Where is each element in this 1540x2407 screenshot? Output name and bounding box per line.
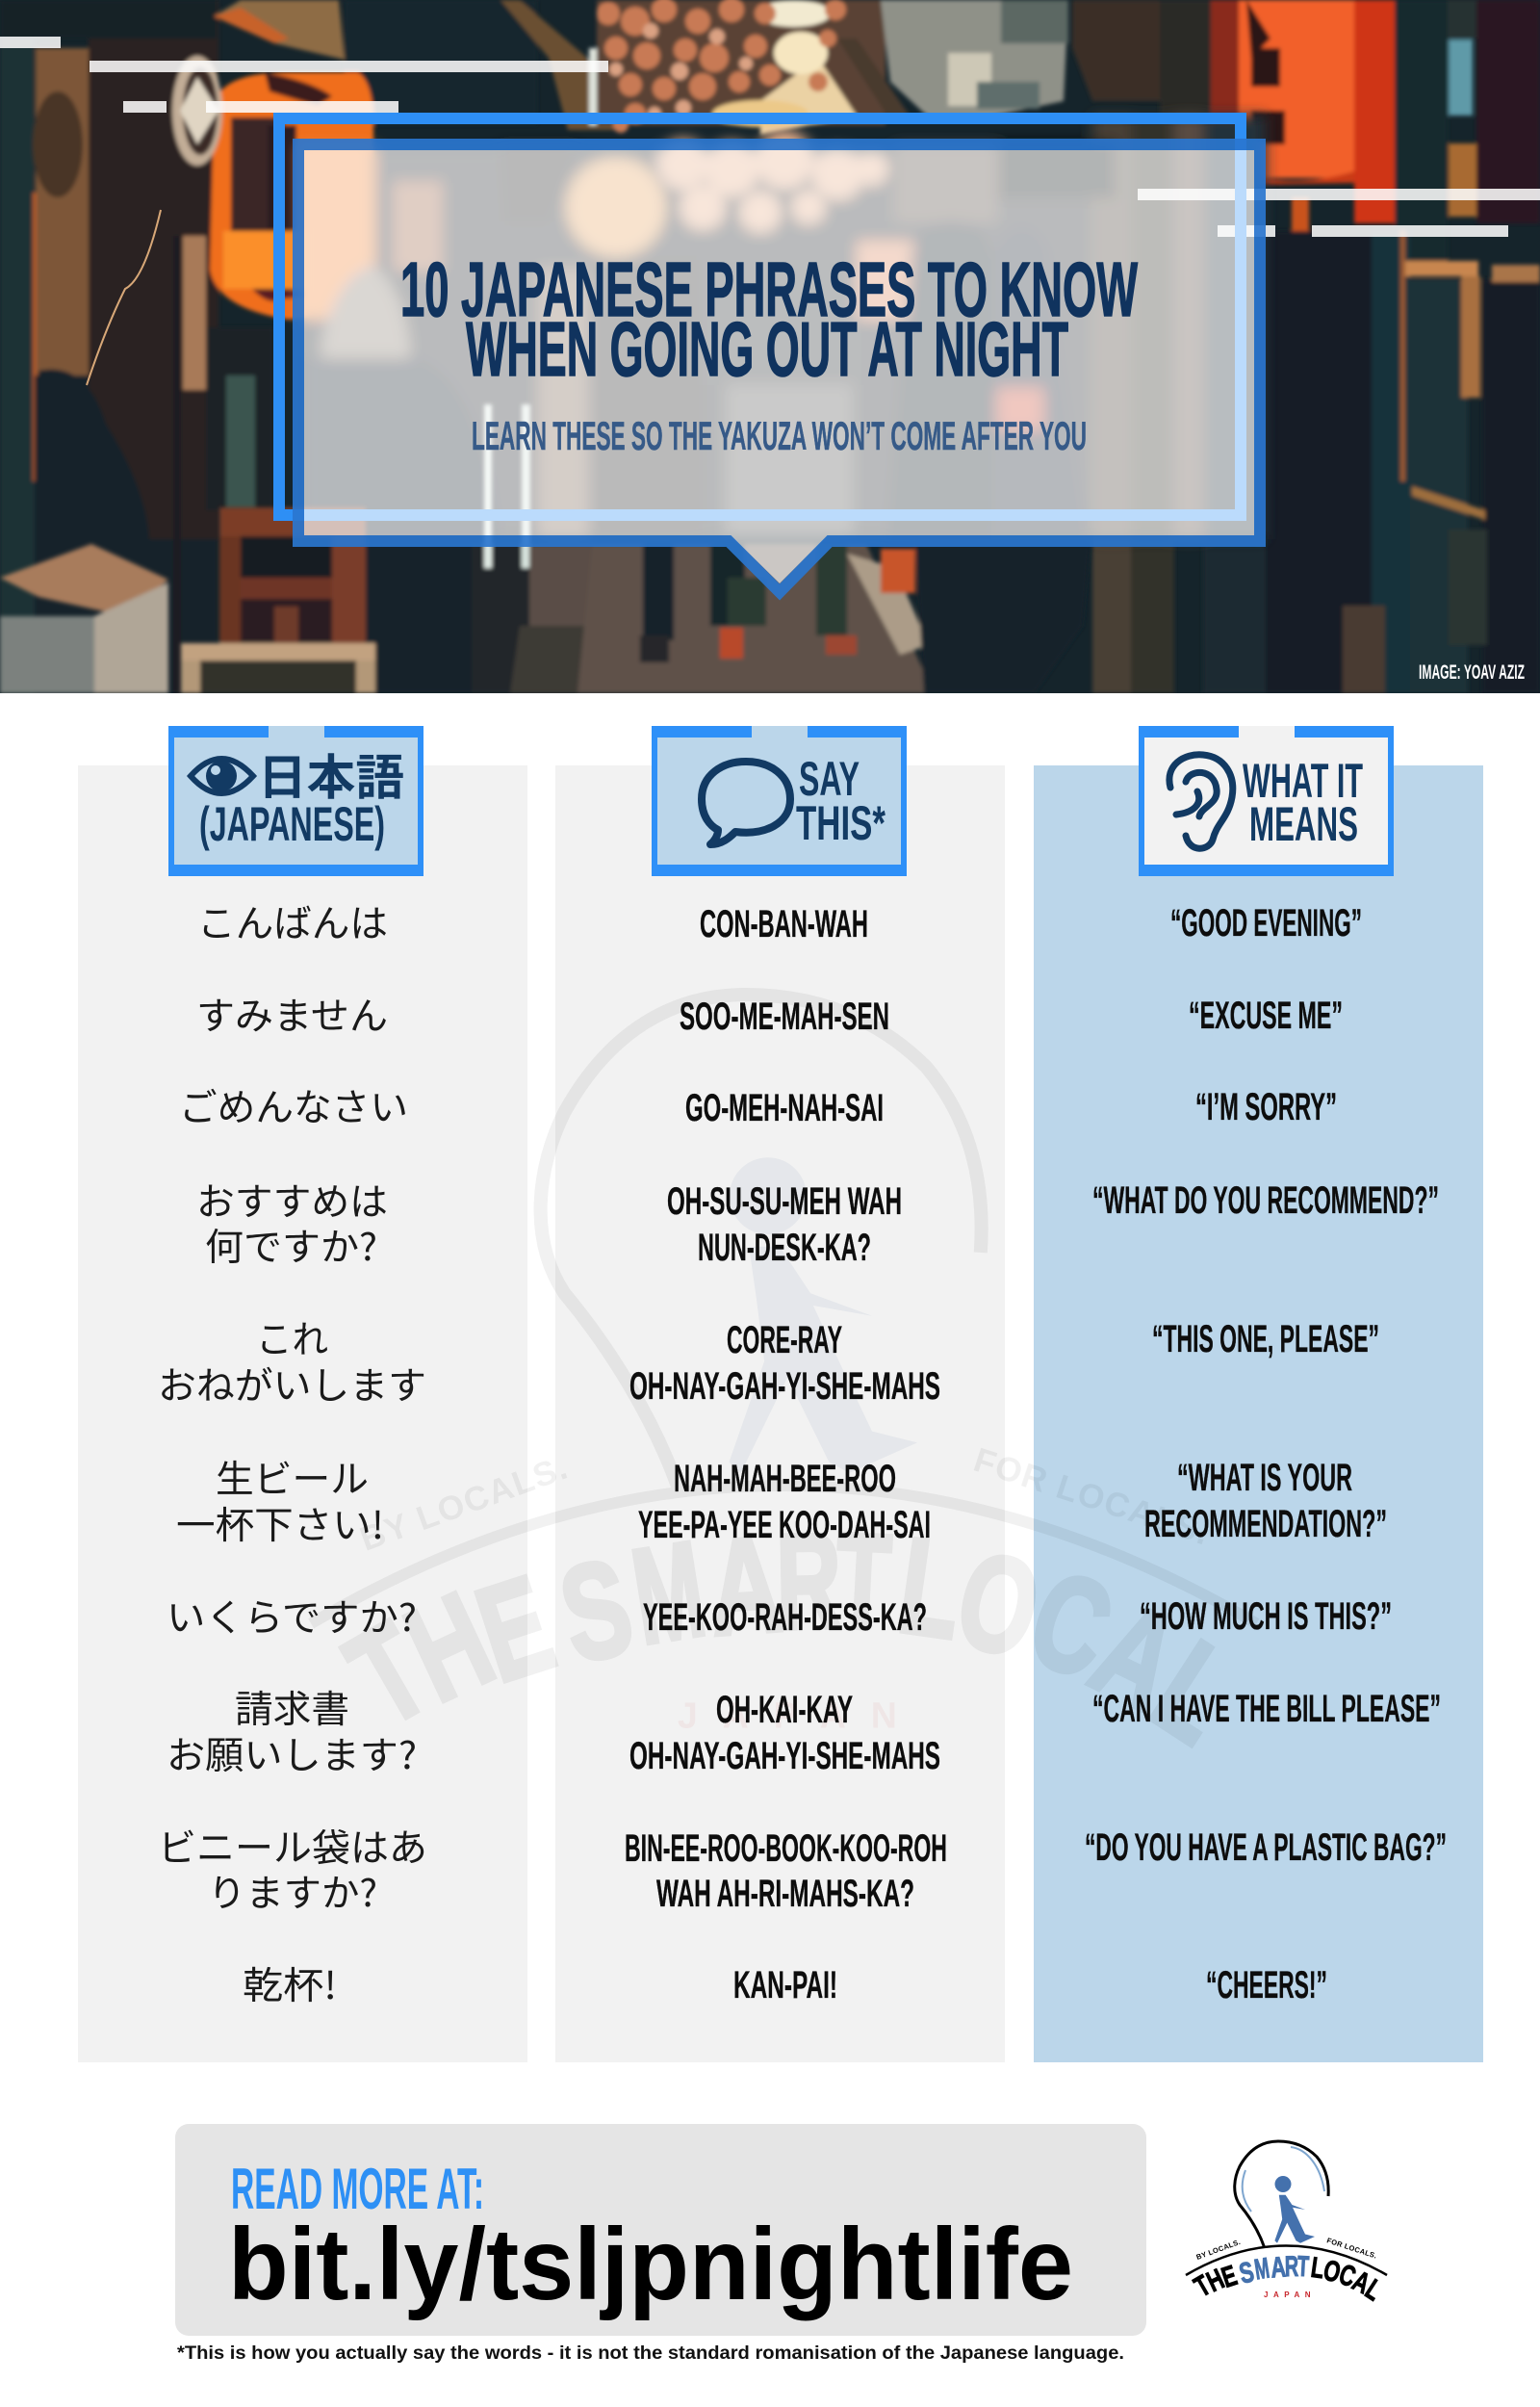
column header: what it means bbox=[1139, 726, 1394, 876]
phrase 9 japanese: りますか? bbox=[208, 1864, 377, 1918]
phrase 6 japanese bbox=[176, 1450, 384, 1550]
phrase 4 pronunciation: NUN-DESK-KA? bbox=[698, 1227, 871, 1269]
phrase 3 meaning: “I’M SORRY” bbox=[1195, 1086, 1337, 1128]
panel: say-this column background bbox=[555, 765, 1005, 2062]
meanings bbox=[1085, 902, 1447, 2006]
phrase 6 pronunciation: YEE-PA-YEE KOO-DAH-SAI bbox=[638, 1504, 931, 1546]
phrase 8 japanese bbox=[167, 1680, 417, 1780]
watermark logo: R bbox=[775, 1506, 842, 1658]
header text: japanese: 日本語 bbox=[258, 739, 404, 809]
logo walking person bbox=[1274, 2176, 1315, 2243]
header text: say: SAY bbox=[799, 752, 860, 806]
watermark logo: E bbox=[461, 1547, 570, 1712]
phrase 8 pronunciation: OH-KAI-KAY bbox=[716, 1689, 853, 1731]
logo wordmark: A bbox=[1270, 2250, 1287, 2284]
logo wordmark: O bbox=[1321, 2253, 1344, 2290]
logo wordmark: T bbox=[1189, 2268, 1216, 2303]
panel: japanese column background bbox=[78, 765, 527, 2062]
phrase 2 pronunciation: SOO-ME-MAH-SEN bbox=[680, 996, 889, 1038]
panel: meaning column background bbox=[1034, 765, 1483, 2062]
title: WHEN GOING OUT AT NIGHT bbox=[466, 306, 1068, 392]
watermark logo: M bbox=[623, 1513, 714, 1673]
phrase 4 pronunciation: OH-SU-SU-MEH WAH bbox=[667, 1180, 902, 1223]
phrase 5 japanese: これ bbox=[256, 1310, 328, 1364]
logo wordmark: L bbox=[1309, 2250, 1326, 2285]
logo wordmark: L bbox=[1359, 2272, 1388, 2307]
phrase 8 japanese: 請求書 bbox=[235, 1680, 349, 1734]
header text: what it: WHAT IT bbox=[1243, 754, 1363, 808]
phrase 5 pronunciation: CORE-RAY bbox=[727, 1319, 842, 1361]
title bbox=[402, 262, 1138, 377]
watermark logo: BY LOCALS. bbox=[355, 1449, 572, 1559]
logo by locals: BY LOCALS. bbox=[1195, 2238, 1242, 2262]
logo wordmark: R bbox=[1285, 2251, 1298, 2283]
icon: speech bubble bbox=[702, 762, 790, 844]
phrase 6 pronunciation: NAH-MAH-BEE-ROO bbox=[674, 1458, 896, 1500]
phrase 1 meaning: “GOOD EVENING” bbox=[1170, 902, 1362, 945]
icon: eye bbox=[191, 759, 253, 793]
logo inner highlights bbox=[1243, 2147, 1324, 2212]
logo wordmark: T bbox=[1296, 2251, 1310, 2283]
phrase 5 pronunciation bbox=[629, 1319, 940, 1408]
watermark logo: L bbox=[890, 1510, 971, 1669]
hero banner bbox=[0, 0, 1540, 693]
phrase 5 meaning: “THIS ONE, PLEASE” bbox=[1152, 1318, 1379, 1360]
phrase 10 pronunciation: KAN-PAI! bbox=[733, 1964, 837, 2006]
logo arc bbox=[1186, 2245, 1387, 2275]
watermark logo: T bbox=[325, 1594, 452, 1755]
phrase 10 japanese: 乾杯! bbox=[243, 1956, 337, 2010]
watermark logo: C bbox=[1012, 1542, 1130, 1708]
column header: say this bbox=[652, 726, 907, 876]
header text: (japanese): (JAPANESE) bbox=[199, 797, 385, 851]
phrase 6 japanese: 一杯下さい! bbox=[176, 1496, 384, 1550]
phrase 1 pronunciation: CON-BAN-WAH bbox=[700, 903, 868, 945]
phrase 4 japanese: おすすめは bbox=[196, 1173, 388, 1227]
phrase 5 japanese: おねがいします bbox=[158, 1357, 426, 1411]
phrase 9 pronunciation bbox=[625, 1827, 947, 1915]
phrase 8 japanese: お願いします? bbox=[167, 1726, 417, 1780]
logo bulb outline bbox=[1235, 2141, 1328, 2247]
watermark logo: JAPAN bbox=[678, 1695, 922, 1735]
short url: bit.ly/tsljpnightlife bbox=[228, 2208, 1073, 2321]
phrase 9 japanese: ビニール袋はあ bbox=[158, 1819, 427, 1873]
phrase 10 meaning: “CHEERS!” bbox=[1206, 1964, 1327, 2006]
japanese phrases bbox=[158, 894, 427, 2010]
phrase 8 pronunciation: OH-NAY-GAH-YI-SHE-MAHS bbox=[629, 1735, 940, 1777]
logo: the smart local japan bbox=[1186, 2141, 1388, 2307]
watermark logo: H bbox=[386, 1565, 514, 1731]
phrase 9 pronunciation: WAH AH-RI-MAHS-KA? bbox=[656, 1873, 914, 1915]
phrase 2 japanese: すみません bbox=[196, 987, 388, 1041]
decorative light bars right bbox=[1138, 189, 1540, 237]
decorative light bars left bbox=[0, 37, 608, 113]
logo wordmark bbox=[1189, 2250, 1388, 2307]
footnote: *This is how you actually say the words - it is not the standard romanisation of the Japanese language. bbox=[177, 2343, 1124, 2364]
watermark logo: T bbox=[832, 1505, 894, 1659]
logo wordmark: S bbox=[1236, 2255, 1257, 2291]
phrase 7 pronunciation: YEE-KOO-RAH-DESS-KA? bbox=[643, 1596, 927, 1639]
phrase 5 pronunciation: OH-NAY-GAH-YI-SHE-MAHS bbox=[629, 1365, 940, 1408]
logo wordmark: M bbox=[1252, 2253, 1271, 2287]
watermark logo: A bbox=[705, 1509, 786, 1665]
logo wordmark: E bbox=[1218, 2259, 1241, 2294]
phrase 3 pronunciation: GO-MEH-NAH-SAI bbox=[685, 1087, 884, 1129]
phrase 6 meaning bbox=[1144, 1457, 1387, 1545]
header text: means: MEANS bbox=[1249, 797, 1358, 851]
phrase 6 pronunciation bbox=[638, 1458, 931, 1546]
logo wordmark: H bbox=[1201, 2262, 1229, 2298]
logo wordmark: A bbox=[1348, 2264, 1375, 2300]
phrase 4 pronunciation bbox=[667, 1180, 902, 1269]
phrase 6 japanese: 生ビール bbox=[216, 1450, 369, 1504]
phrase 3 japanese: ごめんなさい bbox=[179, 1078, 408, 1132]
background photo: night alley bbox=[0, 0, 1540, 693]
logo wordmark: C bbox=[1335, 2257, 1360, 2293]
column header: japanese bbox=[168, 726, 424, 876]
watermark logo: O bbox=[943, 1523, 1054, 1688]
read more label: READ MORE AT: bbox=[231, 2157, 484, 2221]
phrase 7 japanese: いくらですか? bbox=[167, 1589, 417, 1643]
logo japan tag: JAPAN bbox=[1264, 2291, 1316, 2299]
phrase 9 pronunciation: BIN-EE-ROO-BOOK-KOO-ROH bbox=[625, 1827, 947, 1870]
logo for locals: FOR LOCALS. bbox=[1325, 2236, 1378, 2261]
icon: ear bbox=[1169, 755, 1233, 848]
watermark logo: L bbox=[1128, 1613, 1261, 1773]
phrase 4 japanese: 何ですか? bbox=[205, 1218, 377, 1272]
phrase 6 meaning: “WHAT IS YOUR bbox=[1177, 1457, 1352, 1499]
phrase 2 meaning: “EXCUSE ME” bbox=[1189, 995, 1343, 1037]
watermark logo: S bbox=[548, 1531, 645, 1693]
header text: this: THIS* bbox=[796, 796, 886, 850]
watermark logo bbox=[311, 995, 1261, 1773]
watermark logo: FOR LOCALS. bbox=[969, 1441, 1213, 1553]
read-more panel bbox=[175, 2124, 1146, 2336]
pronunciation phrases bbox=[625, 903, 947, 2006]
phrase 1 japanese: こんばんは bbox=[197, 894, 388, 948]
phrase 9 japanese bbox=[158, 1819, 427, 1918]
phrase 5 japanese bbox=[158, 1310, 426, 1411]
phrase 4 japanese bbox=[196, 1173, 388, 1272]
title speech-bubble frame bbox=[279, 118, 1260, 592]
watermark logo: A bbox=[1071, 1573, 1201, 1741]
phrase 8 pronunciation bbox=[629, 1689, 940, 1777]
